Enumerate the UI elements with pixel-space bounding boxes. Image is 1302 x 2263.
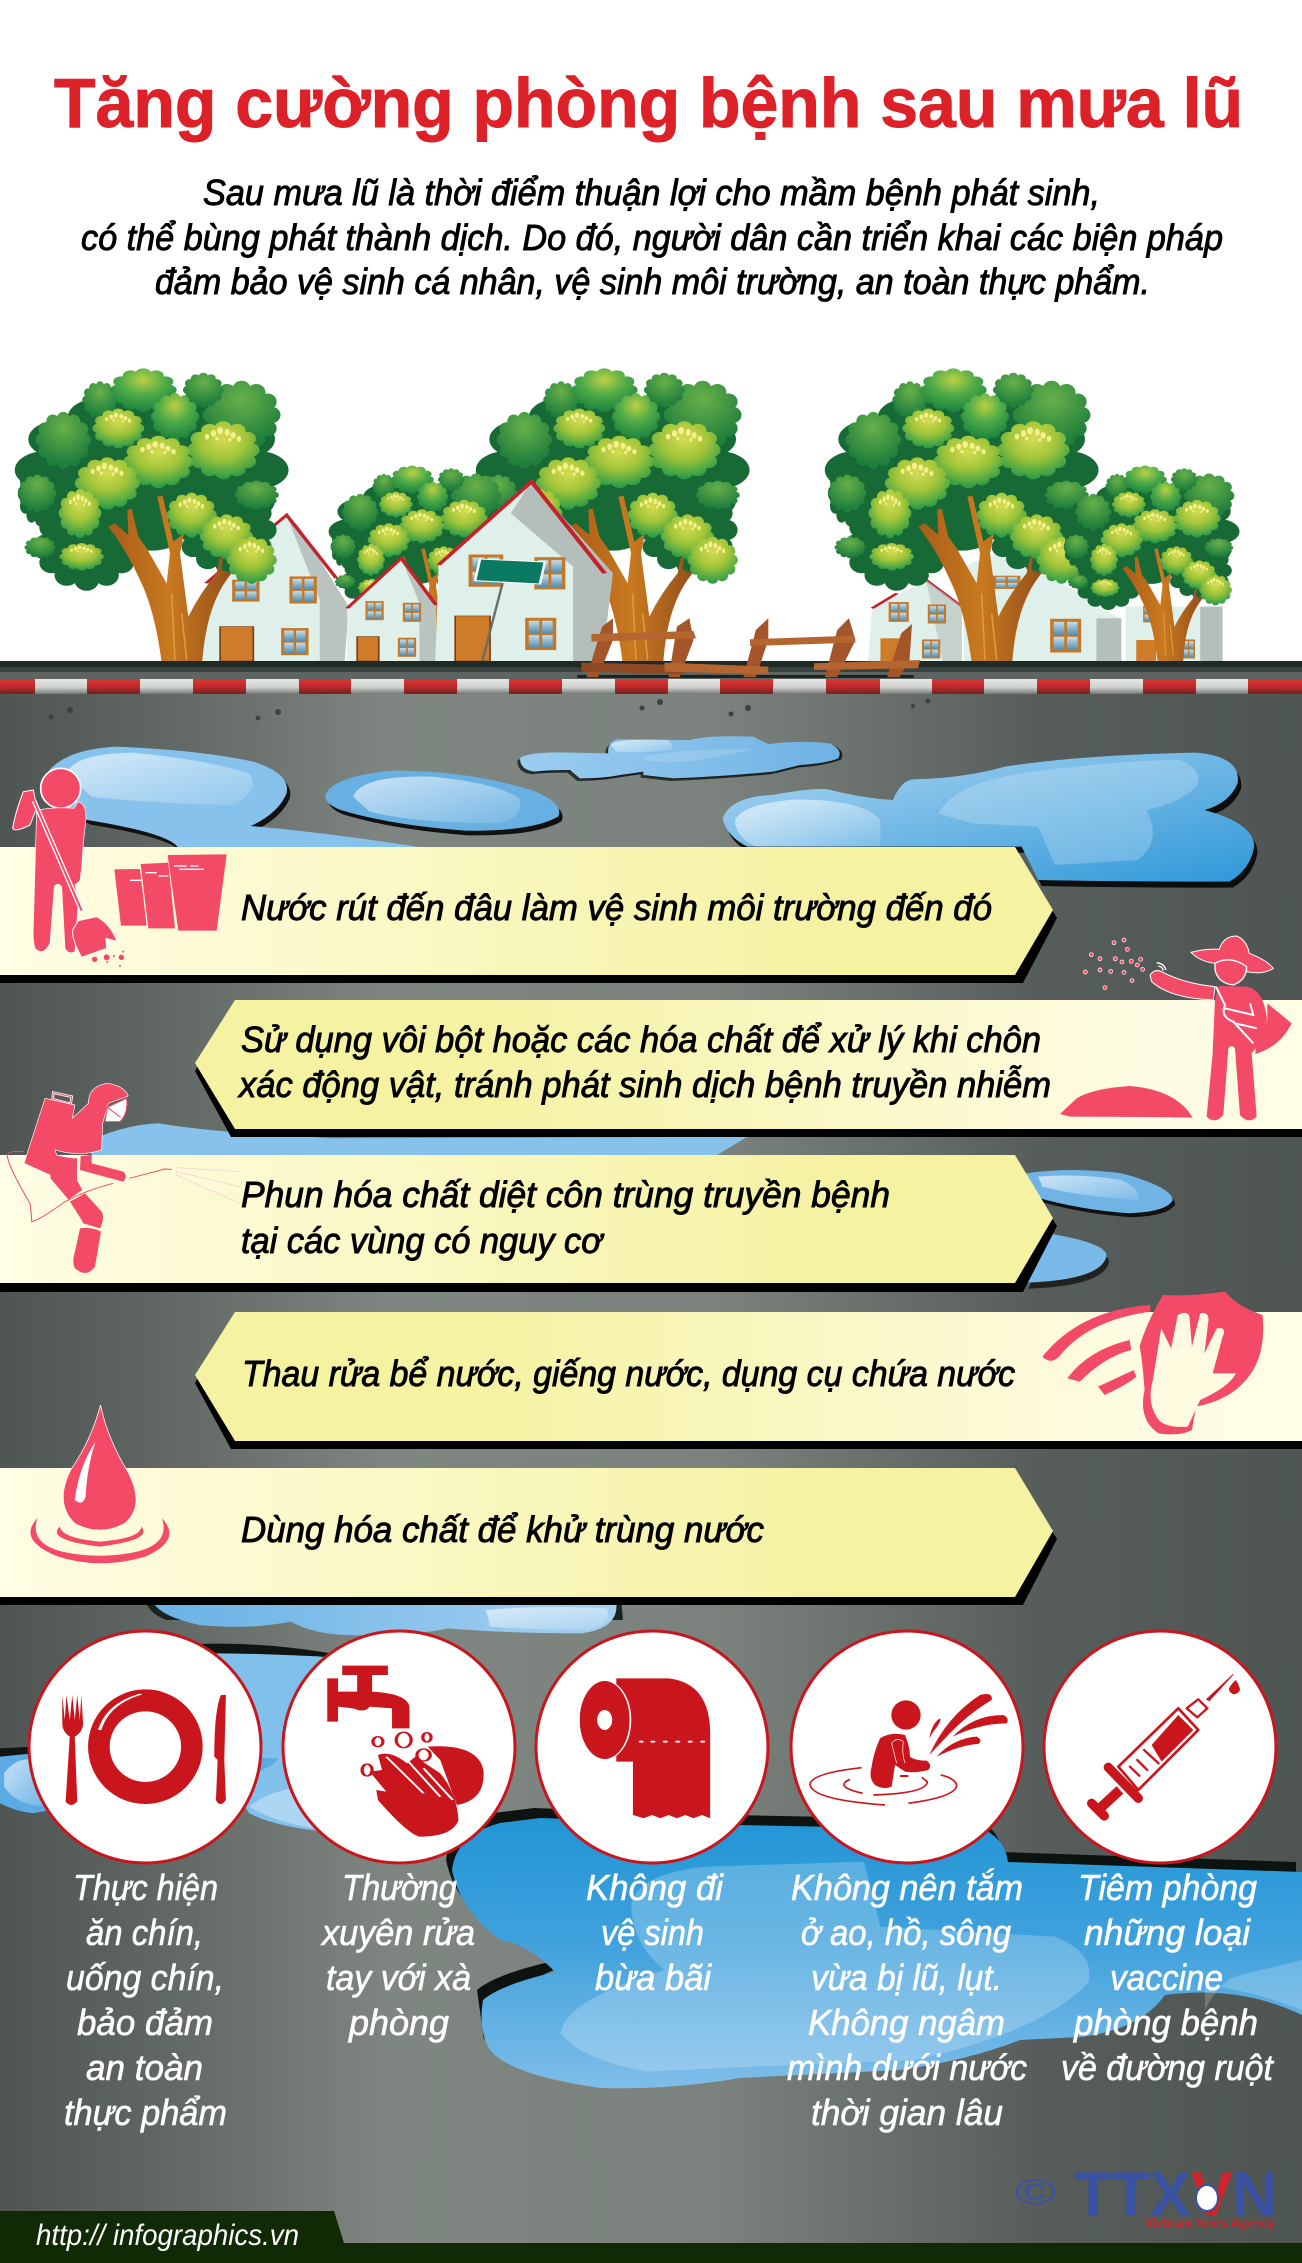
road background xyxy=(0,661,1302,2263)
band 5 text: Dùng hóa chất để khử trùng nước xyxy=(241,1509,764,1550)
band 2 text: Sử dụng vôi bột hoặc các hóa chất để xử lý khi chôn xyxy=(241,1019,1041,1060)
caption: food safety: an toàn xyxy=(86,2047,203,2088)
icon: person spraying insecticide xyxy=(7,1083,240,1273)
small puddle right xyxy=(1026,1170,1175,1217)
caption: bathing: ở ao, hồ, sông xyxy=(801,1912,1011,1953)
tree: right large xyxy=(825,368,1099,677)
band 3 text: Phun hóa chất diệt côn trùng truyền bệnh xyxy=(241,1174,890,1215)
caption: toilet hygiene: bừa bãi xyxy=(595,1957,712,1998)
caption: food safety: thực phẩm xyxy=(64,2092,227,2133)
puddle beside band 3 bottom xyxy=(1026,1233,1109,1289)
puddle right xyxy=(723,753,1258,888)
caption: toilet hygiene xyxy=(586,1867,724,1998)
caption: food safety: Thực hiện xyxy=(73,1867,218,1908)
band 2 text xyxy=(237,1019,1051,1105)
puddle under band 5 xyxy=(145,1602,623,1635)
band 2 text: xác động vật, tránh phát sinh dịch bệnh truyền nhiễm xyxy=(237,1064,1051,1105)
caption: toilet hygiene: vệ sinh xyxy=(601,1912,704,1953)
logo: TTXVN: Vietnam News Agency xyxy=(1145,2216,1275,2230)
caption: vaccination xyxy=(1061,1867,1275,2088)
band 4 xyxy=(195,1312,1302,1449)
intro text: Sau mưa lũ là thời điểm thuận lợi cho mầm bệnh phát sinh, xyxy=(203,172,1100,213)
band 1 xyxy=(0,847,1057,983)
puddle under band 2 xyxy=(91,1123,748,1157)
broken wooden fence xyxy=(577,618,920,678)
puddle middle xyxy=(325,771,563,835)
circle: toilet hygiene xyxy=(536,1631,768,1863)
tree: left large xyxy=(15,368,289,677)
big puddle bottom xyxy=(446,1808,1302,2088)
band 3 text: tại các vùng có nguy cơ xyxy=(241,1220,605,1261)
circle: no bathing in flood water xyxy=(791,1631,1023,1863)
tree: centre large xyxy=(476,368,750,677)
icon: toilet paper roll xyxy=(579,1678,710,1818)
caption: bathing: Không ngâm xyxy=(808,2002,1005,2043)
caption: food safety: bảo đảm xyxy=(77,2002,213,2043)
icon: farmer spreading lime xyxy=(1060,936,1292,1120)
icon: tap and soapy hands xyxy=(327,1666,484,1837)
puddles: behind circles xyxy=(0,1602,1302,2088)
caption: food safety: uống chín, xyxy=(66,1957,224,1998)
circle: vaccination xyxy=(1044,1631,1276,1863)
icon: person in water with splash xyxy=(810,1694,1008,1805)
caption: food safety xyxy=(64,1867,227,2133)
icon: water drop xyxy=(30,1405,169,1563)
caption: bathing xyxy=(787,1867,1027,2133)
intro text: đảm bảo vệ sinh cá nhân, vệ sinh môi trường, an toàn thực phẩm. xyxy=(155,261,1150,302)
caption: bathing: mình dưới nước xyxy=(787,2047,1027,2088)
caption: vaccination: phòng bệnh xyxy=(1073,2002,1258,2043)
white header background xyxy=(0,0,1302,662)
caption: bathing: Không nên tắm xyxy=(791,1867,1023,1908)
tree: right small xyxy=(1062,465,1240,666)
puddles: upper road xyxy=(42,736,1258,1217)
icon: syringe xyxy=(1092,1674,1240,1816)
caption: vaccination: vaccine xyxy=(1110,1957,1223,1998)
houses: right group xyxy=(868,553,1223,661)
caption: hand washing: xuyên rửa xyxy=(320,1912,475,1953)
caption: toilet hygiene: Không đi xyxy=(586,1867,724,1908)
illustration: village with trees and houses xyxy=(15,368,1240,679)
logo: TTXVN: TTXVN xyxy=(1074,2160,1277,2230)
caption: hand washing: phòng xyxy=(348,2002,449,2043)
logo: TTXVN: © xyxy=(1015,2171,1056,2212)
caption: vaccination: Tiêm phòng xyxy=(1078,1867,1257,1908)
band 2 xyxy=(195,1000,1302,1137)
footer url: http:// infographics.vn xyxy=(36,2219,299,2252)
caption: hand washing: tay với xà xyxy=(326,1957,471,1998)
band 3 xyxy=(0,1155,1057,1292)
tree: centre small xyxy=(329,465,507,666)
road edge and curb xyxy=(0,661,1302,720)
icon: hand wiping with cloth xyxy=(1042,1292,1263,1434)
puddle left xyxy=(42,747,431,853)
band 4 text: Thau rửa bể nước, giếng nước, dụng cụ chứa nước xyxy=(242,1353,1015,1394)
circle: food safety xyxy=(29,1631,261,1863)
caption: vaccination: những loại xyxy=(1084,1912,1251,1953)
intro text: có thể bùng phát thành dịch. Do đó, người dân cần triển khai các biện pháp xyxy=(81,217,1223,258)
icon: plate, fork and knife xyxy=(62,1689,226,1805)
puddle left behind circles xyxy=(0,1644,349,1833)
band 5 xyxy=(0,1468,1057,1605)
intro text xyxy=(81,172,1223,302)
house 2 xyxy=(347,558,436,661)
caption: vaccination: về đường ruột xyxy=(1061,2047,1275,2088)
band 3 text xyxy=(241,1174,890,1261)
band 1 text: Nước rút đến đâu làm vệ sinh môi trường đến đó xyxy=(241,887,992,928)
house 3 with street sign xyxy=(435,482,613,679)
puddle top xyxy=(517,736,842,781)
house 1 xyxy=(203,515,349,661)
caption: food safety: ăn chín, xyxy=(86,1912,203,1953)
circle: hand washing xyxy=(283,1631,515,1863)
caption: bathing: vừa bị lũ, lụt. xyxy=(811,1957,1002,1998)
icon: person sweeping with bins xyxy=(13,768,227,967)
footer bar xyxy=(0,2211,1302,2263)
caption: bathing: thời gian lâu xyxy=(811,2092,1003,2133)
caption: hand washing: Thường xyxy=(342,1867,457,1908)
title: Tăng cường phòng bệnh sau mưa lũ xyxy=(54,64,1243,142)
caption: hand washing xyxy=(320,1867,475,2043)
